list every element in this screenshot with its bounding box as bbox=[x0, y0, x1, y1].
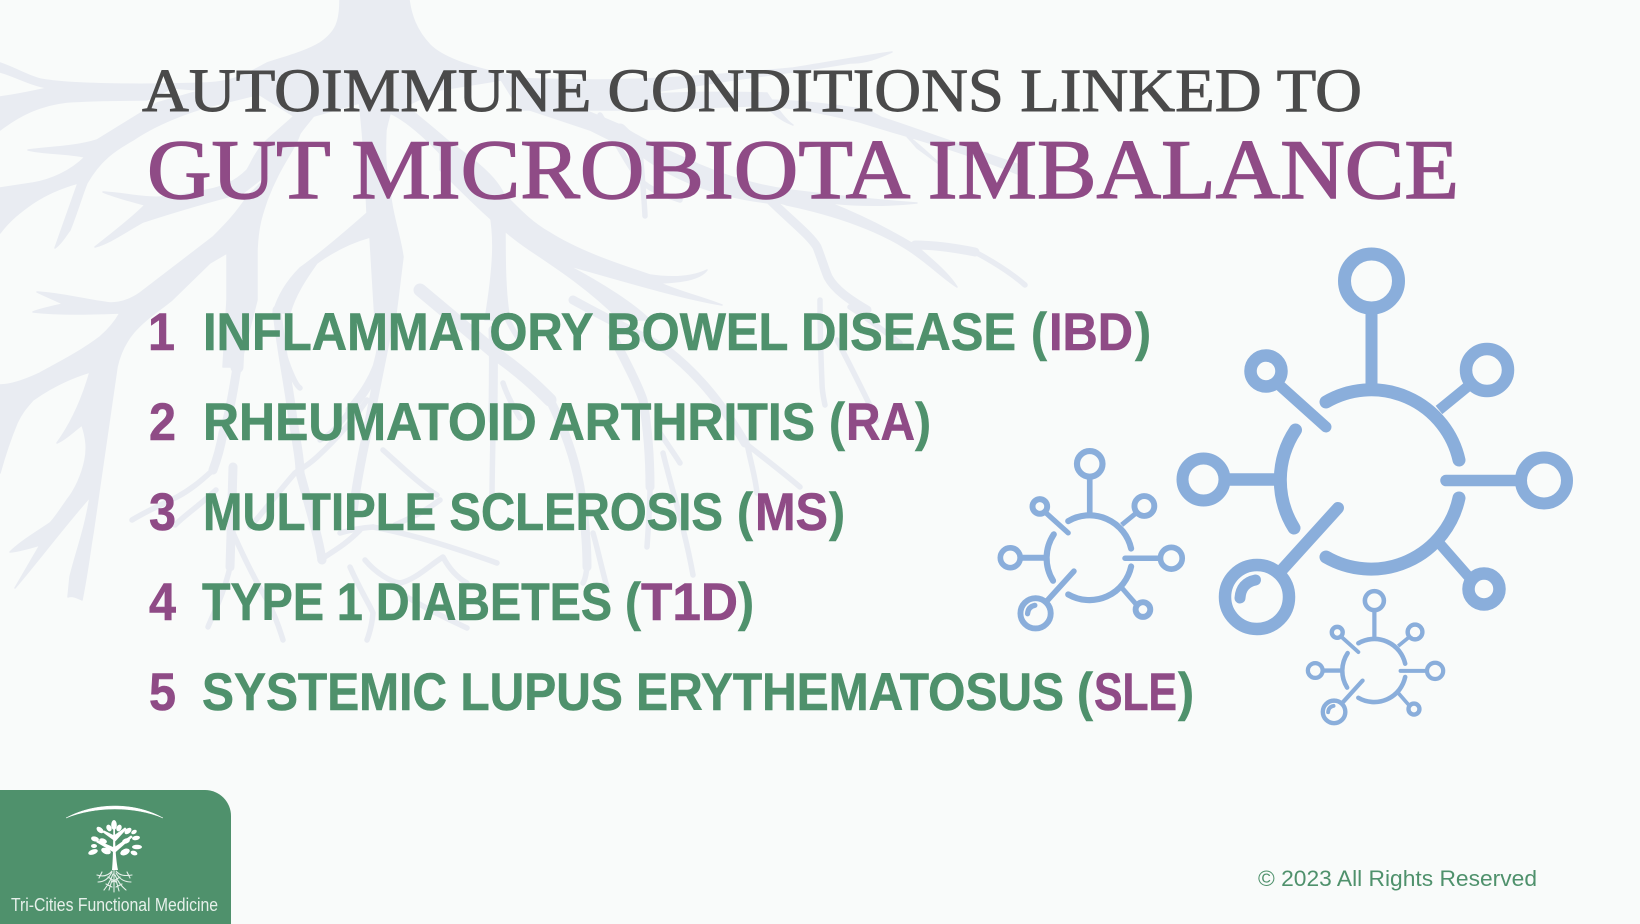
background: tree roots bbox=[0, 0, 1025, 640]
item 2: ) bbox=[915, 393, 931, 452]
item 1: ( bbox=[1031, 303, 1047, 362]
title line 1: AUTOIMMUNE CONDITIONS LINKED TO bbox=[142, 58, 1362, 125]
item 2: ( bbox=[829, 393, 845, 452]
item 3: 3 bbox=[149, 483, 176, 542]
item 3: MS bbox=[755, 483, 828, 542]
title line 2: GUT MICROBIOTA IMBALANCE bbox=[147, 123, 1459, 217]
item 1: IBD bbox=[1049, 303, 1133, 362]
item 4: ( bbox=[625, 573, 641, 632]
item 5: 5 bbox=[149, 663, 176, 722]
icon: small microbe left bbox=[1000, 451, 1182, 628]
item 4: T1D bbox=[641, 573, 738, 632]
logo arc bbox=[66, 806, 163, 818]
logo roots bbox=[97, 869, 132, 892]
item 5: ( bbox=[1077, 663, 1093, 722]
item 1: 1 bbox=[148, 303, 175, 362]
item 4: TYPE 1 DIABETES bbox=[202, 573, 612, 632]
item 3: ) bbox=[829, 483, 845, 542]
item 2: 2 bbox=[149, 393, 176, 452]
copyright: © 2023 All Rights Reserved bbox=[1258, 866, 1537, 891]
item 3: MULTIPLE SCLEROSIS bbox=[203, 483, 723, 542]
icon: large microbe bbox=[1182, 254, 1567, 629]
item 4: ) bbox=[738, 573, 754, 632]
item 3: ( bbox=[737, 483, 753, 542]
item 4: 4 bbox=[149, 573, 176, 632]
logo tree icon bbox=[87, 820, 142, 870]
icon: small microbe bottom bbox=[1308, 591, 1443, 723]
item 5: SYSTEMIC LUPUS ERYTHEMATOSUS bbox=[202, 663, 1064, 722]
logo wordmark: Tri-Cities Functional Medicine bbox=[11, 895, 218, 915]
logo panel bbox=[0, 790, 231, 924]
item 2: RHEUMATOID ARTHRITIS bbox=[203, 393, 815, 452]
condition list bbox=[148, 303, 1194, 722]
item 5: SLE bbox=[1094, 663, 1177, 722]
item 2: RA bbox=[846, 393, 915, 452]
item 1: INFLAMMATORY BOWEL DISEASE bbox=[203, 303, 1016, 362]
item 1: ) bbox=[1135, 303, 1151, 362]
item 5: ) bbox=[1178, 663, 1194, 722]
title bbox=[142, 58, 1459, 217]
